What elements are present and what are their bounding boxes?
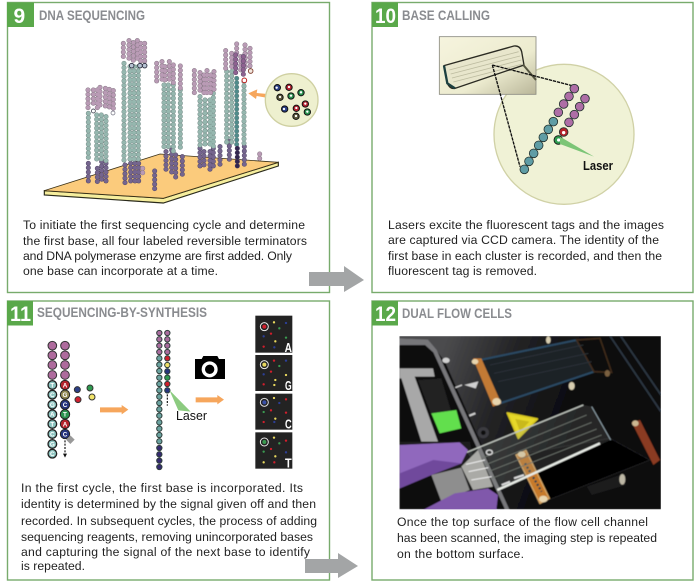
text block: step 10 description: first base in each cluster is recorded, and then the bbox=[388, 249, 662, 263]
image tile: T: T bbox=[285, 457, 292, 471]
text block: step 11 description bbox=[21, 481, 317, 573]
flow cell photo inset bbox=[439, 37, 536, 94]
step number badge 11: 11 bbox=[10, 303, 31, 326]
text block: step 12 description bbox=[397, 515, 657, 561]
text block: step 10 description: Lasers excite the fluorescent tags and the images bbox=[388, 218, 664, 232]
template strand with labeled bases: C bbox=[63, 431, 68, 438]
template strand with labeled bases: C bbox=[50, 431, 55, 438]
flow cell plate bbox=[44, 154, 278, 203]
heading: base calling: BASE CALLING bbox=[402, 7, 490, 23]
template strand with labeled bases: G bbox=[50, 441, 55, 448]
text block: step 12 description: has been scanned, the imaging step is repeated bbox=[397, 531, 657, 545]
text block: step 10 description bbox=[388, 218, 664, 278]
photo: flow cell loaded into instrument bbox=[399, 336, 661, 510]
free nucleotides bbox=[74, 385, 95, 403]
text block: step 9 description bbox=[23, 218, 307, 278]
image tile: G: G bbox=[285, 379, 292, 393]
magnified cluster circle bbox=[494, 64, 634, 204]
text block: step 9 description: and DNA polymerase enzyme are first added. Only bbox=[23, 249, 293, 263]
text block: step 12 description: Once the top surface of the flow cell channel bbox=[397, 515, 648, 529]
teal and purple base beads bbox=[520, 84, 589, 174]
instrument deck bbox=[399, 336, 661, 509]
panel: step 12 dual flow cells bbox=[372, 301, 693, 580]
template strand with labeled bases: C bbox=[50, 392, 55, 399]
upper flow cell bbox=[480, 340, 594, 403]
icon: camera bbox=[195, 356, 225, 379]
text block: step 10 description: fluorescent tag is removed. bbox=[388, 264, 537, 278]
step number badge 9 bbox=[7, 2, 34, 28]
image tile: C: C bbox=[285, 418, 292, 432]
image tile: A: A bbox=[285, 341, 292, 355]
template strand with labeled bases: A bbox=[63, 421, 68, 428]
label: laser: Laser bbox=[176, 408, 208, 423]
illustration: sequencing by synthesis cycle bbox=[48, 316, 292, 471]
image tile: A bbox=[255, 316, 292, 355]
template strand with labeled bases: A bbox=[63, 382, 68, 389]
dashed zoom lines bbox=[492, 65, 573, 167]
text block: step 11 description: and capturing the signal of the next base to identify bbox=[21, 545, 311, 559]
template strand with labeled bases: A bbox=[50, 412, 55, 419]
text block: step 11 description: recorded. In subsequent cycles, the process of adding bbox=[21, 514, 317, 528]
arrow: to incorporated strand bbox=[100, 405, 128, 414]
text block: step 11 description: is repeated. bbox=[21, 559, 85, 573]
text block: step 9 description: To initiate the first sequencing cycle and determine bbox=[23, 218, 305, 232]
text block: step 10 description: are captured via CCD camera. The identity of the bbox=[388, 233, 659, 247]
text block: step 9 description: one base can incorporate at a time. bbox=[23, 264, 218, 278]
lower holder bbox=[516, 438, 650, 503]
image tile: T bbox=[255, 432, 292, 471]
arrow: step 9 to step 10 bbox=[309, 266, 364, 292]
laser beam bbox=[169, 390, 191, 412]
text block: step 11 description: In the first cycle, the first base is incorporated. Its bbox=[21, 481, 303, 495]
template strand with labeled bases: C bbox=[50, 451, 55, 458]
image tile: C bbox=[255, 394, 292, 432]
panel: step 11 sequencing by synthesis bbox=[7, 301, 330, 580]
heading: dual flow cells: DUAL FLOW CELLS bbox=[402, 305, 512, 321]
inset circle: free labeled nucleotides bbox=[265, 74, 318, 126]
laser beam bbox=[560, 137, 594, 157]
template strand with labeled bases: G bbox=[63, 392, 68, 399]
template strand with labeled bases: T bbox=[63, 412, 67, 419]
step number badge 9: 9 bbox=[14, 5, 25, 28]
text block: step 12 description: on the bottom surface. bbox=[397, 547, 524, 561]
template strand with labeled bases bbox=[48, 341, 75, 458]
template strand with labeled bases: C bbox=[63, 402, 68, 409]
arrow: step 11 to step 12 bbox=[305, 553, 358, 578]
text block: step 9 description: the first base, all four labeled reversible terminators bbox=[23, 234, 307, 248]
step number badge 12: 12 bbox=[375, 303, 396, 326]
step number badge 10: 10 bbox=[375, 5, 396, 28]
template strand with labeled bases: T bbox=[50, 382, 54, 389]
text block: step 11 description: sequencing reagents, removing unincorporated bases bbox=[21, 530, 313, 544]
illustration: laser excitation of a cluster bbox=[439, 37, 634, 204]
template strand with labeled bases: G bbox=[50, 402, 55, 409]
template strand with labeled bases: T bbox=[50, 421, 54, 428]
arrow: to captured images bbox=[196, 395, 224, 404]
illustration: DNA clusters on flow cell surface bbox=[44, 41, 318, 203]
heading: DNA sequencing: DNA SEQUENCING bbox=[39, 7, 145, 23]
warning triangle bbox=[507, 413, 537, 438]
text block: step 11 description: identity is determined by the signal given off and then bbox=[21, 497, 316, 511]
image tile: G bbox=[255, 355, 292, 393]
panel: step 9 DNA sequencing bbox=[7, 2, 330, 292]
markings on deck bbox=[442, 358, 450, 363]
heading: sequencing by synthesis: SEQUENCING-BY-SYNTHESIS bbox=[37, 304, 207, 320]
arrow: nucleotides added bbox=[248, 89, 272, 99]
extended strand bbox=[157, 330, 170, 470]
DNA strand columns bbox=[88, 41, 260, 192]
label: laser: Laser bbox=[583, 159, 613, 173]
panel: step 10 base calling bbox=[372, 2, 693, 292]
glass flow cell held by gloved fingers bbox=[467, 405, 611, 490]
